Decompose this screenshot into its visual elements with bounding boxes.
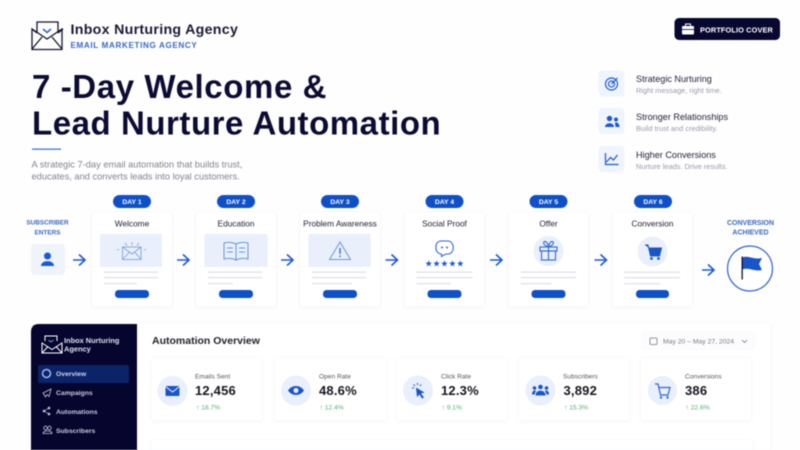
day 5 card: offer	[509, 195, 588, 306]
day 4 card: social proof: DAY 4	[435, 199, 454, 206]
arrow	[490, 254, 502, 266]
kpi: subscribers: ↑ 15.3%	[564, 404, 588, 412]
kpi: emails sent: Emails Sent	[195, 374, 230, 380]
kpi: click rate: Click Rate	[441, 374, 471, 380]
day 2 card: education	[196, 195, 276, 306]
arrow	[73, 254, 85, 266]
benefit: strategic nurturing: Strategic Nurturing	[636, 74, 712, 84]
kpi: subscribers	[519, 358, 629, 420]
kpi: emails sent: ↑ 18.7%	[196, 404, 220, 412]
kpi: subscribers: 3,892	[564, 383, 597, 398]
flow start: subscriber enters: SUBSCRIBER	[26, 220, 69, 226]
day 1 card: welcome: Welcome	[115, 218, 150, 228]
kpi: conversions: 386	[685, 383, 707, 398]
flow end: conversion achieved	[727, 220, 774, 291]
kpi: conversions: ↑ 22.6%	[686, 404, 710, 412]
day 1 card: welcome: DAY 1	[122, 199, 142, 206]
agency tagline: EMAIL MARKETING AGENCY	[70, 41, 197, 50]
day 2 card: education: DAY 2	[226, 199, 246, 206]
lower dashboard panel edge	[152, 440, 752, 450]
day 3 card: problem awareness: DAY 3	[330, 199, 350, 206]
flow start: subscriber enters	[26, 220, 69, 275]
arrow	[177, 254, 189, 266]
sidebar: Campaigns	[56, 390, 93, 397]
benefit: higher conversions: Higher Conversions	[636, 150, 716, 160]
subtitle: A strategic 7-day email automation that builds trust,	[32, 160, 242, 170]
day 6 card: conversion: Conversion	[632, 218, 674, 228]
kpi: click rate: 12.3%	[441, 383, 479, 398]
arrow	[386, 254, 398, 266]
sidebar: Inbox Nurturing	[64, 336, 120, 345]
day 5 card: offer: DAY 5	[539, 199, 558, 206]
main title: Lead Nurture Automation	[32, 104, 441, 142]
subtitle: educates, and converts leads into loyal customers.	[32, 172, 240, 182]
title accent rule	[32, 148, 61, 150]
day 3 card: problem awareness: Problem Awareness	[303, 218, 377, 228]
arrow	[702, 264, 714, 276]
agency name: Inbox Nurturing Agency	[70, 22, 238, 38]
arrow	[594, 254, 606, 266]
sidebar: Agency	[64, 344, 92, 354]
day 3 card: problem awareness	[300, 195, 380, 306]
panel heading: Automation Overview	[152, 335, 261, 347]
day 4 card: social proof	[405, 195, 484, 306]
arrow	[281, 254, 293, 266]
date range picker	[641, 331, 756, 350]
day 4 card: social proof: Social Proof	[422, 218, 468, 228]
benefit: higher conversions	[598, 146, 728, 172]
header logo: envelope icon	[32, 22, 63, 50]
kpi: conversions	[641, 358, 751, 420]
flow end: conversion achieved: ACHIEVED	[732, 230, 769, 236]
kpi: open rate: 48.6%	[319, 383, 357, 398]
sidebar: Overview	[56, 371, 87, 378]
kpi: open rate: ↑ 12.4%	[320, 404, 344, 412]
dashboard panel	[31, 323, 770, 450]
portfolio cover button: PORTFOLIO COVER	[700, 25, 774, 34]
kpi: conversions: Conversions	[685, 374, 722, 380]
benefit: strategic nurturing: Right message, right time.	[636, 86, 722, 95]
benefit: stronger relationships	[598, 108, 728, 134]
kpi: emails sent	[152, 358, 262, 420]
benefit: stronger relationships: Stronger Relationships	[636, 112, 728, 122]
sidebar: Automations	[56, 409, 98, 416]
day 6 card: conversion: DAY 6	[643, 199, 663, 206]
kpi: emails sent: 12,456	[195, 383, 236, 398]
kpi: subscribers: Subscribers	[563, 374, 599, 380]
flow end: conversion achieved: CONVERSION	[727, 220, 774, 227]
portfolio cover button	[674, 18, 780, 40]
sidebar: Subscribers	[56, 428, 96, 435]
kpi: click rate: ↑ 9.1%	[442, 404, 462, 412]
date range picker: May 20 – May 27, 2024	[663, 338, 734, 346]
day 4 card: social proof: ★★★★★	[425, 260, 464, 270]
day 2 card: education: Education	[218, 218, 255, 228]
main title: 7 -Day Welcome &	[32, 68, 327, 105]
flow start: subscriber enters: ENTERS	[35, 230, 61, 236]
kpi: open rate: Open Rate	[319, 374, 351, 380]
benefit: strategic nurturing	[598, 70, 722, 96]
day 5 card: offer: Offer	[539, 218, 558, 228]
day 6 card: conversion	[613, 195, 692, 306]
kpi: open rate	[275, 358, 386, 420]
sidebar	[31, 324, 137, 450]
kpi: click rate	[397, 358, 507, 420]
day 1 card: welcome	[92, 195, 172, 306]
benefit: stronger relationships: Build trust and credibility.	[636, 124, 718, 133]
benefit: higher conversions: Nurture leads. Drive results.	[636, 162, 728, 171]
